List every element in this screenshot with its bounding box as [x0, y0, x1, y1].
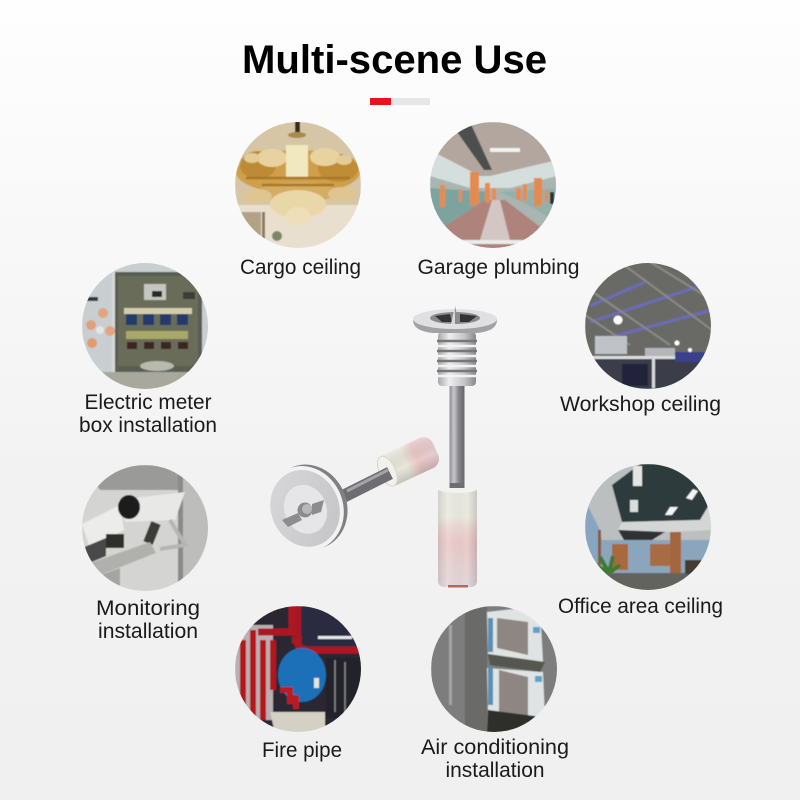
label: installation: [98, 620, 198, 643]
photo: office interior: [585, 464, 712, 591]
label: box installation: [79, 414, 217, 437]
label: [96, 597, 200, 643]
label: Fire pipe: [262, 739, 342, 762]
photo: open electrical cabinet: [82, 262, 209, 390]
scene: workshop ceiling: [560, 262, 721, 416]
label: Office area ceiling: [558, 595, 723, 618]
disc head: [254, 453, 360, 562]
label: Electric meter: [84, 391, 212, 414]
label: Garage plumbing: [418, 256, 580, 279]
photo: outdoor AC units: [431, 606, 558, 733]
scene: office area ceiling: [558, 464, 723, 618]
product: horizontal nail with sleeve: [254, 434, 442, 562]
neck: [325, 481, 351, 515]
scene: air conditioning installation: [421, 606, 569, 782]
white and pink sleeve: [373, 434, 442, 490]
photo: security cameras: [82, 465, 209, 595]
label: Air conditioning: [421, 736, 569, 759]
product: vertical nail with sleeve: [413, 306, 497, 588]
scene: garage plumbing: [418, 122, 580, 279]
label: [421, 736, 569, 782]
title accent bar: [370, 98, 430, 105]
scene: electric meter box: [79, 262, 217, 437]
shaft: [344, 473, 390, 496]
photo: factory ceiling: [585, 262, 712, 389]
white and pink sleeve: [438, 483, 477, 588]
scene: monitoring installation: [82, 465, 209, 643]
countersink reflections: [282, 513, 302, 527]
label: Workshop ceiling: [560, 393, 721, 416]
label: [79, 391, 217, 437]
scene: cargo ceiling: [235, 120, 361, 279]
shaft: [450, 380, 464, 490]
head: [413, 306, 497, 333]
photo: chandelier: [235, 120, 361, 250]
threads: [437, 332, 477, 386]
label: installation: [446, 759, 544, 782]
photo: red pipes and blue tank: [235, 606, 362, 733]
scene: fire pipe: [235, 606, 362, 762]
title: Multi-scene Use: [242, 38, 547, 82]
label: Monitoring: [96, 597, 200, 620]
label: Cargo ceiling: [240, 256, 361, 279]
photo: parking garage: [430, 122, 557, 249]
